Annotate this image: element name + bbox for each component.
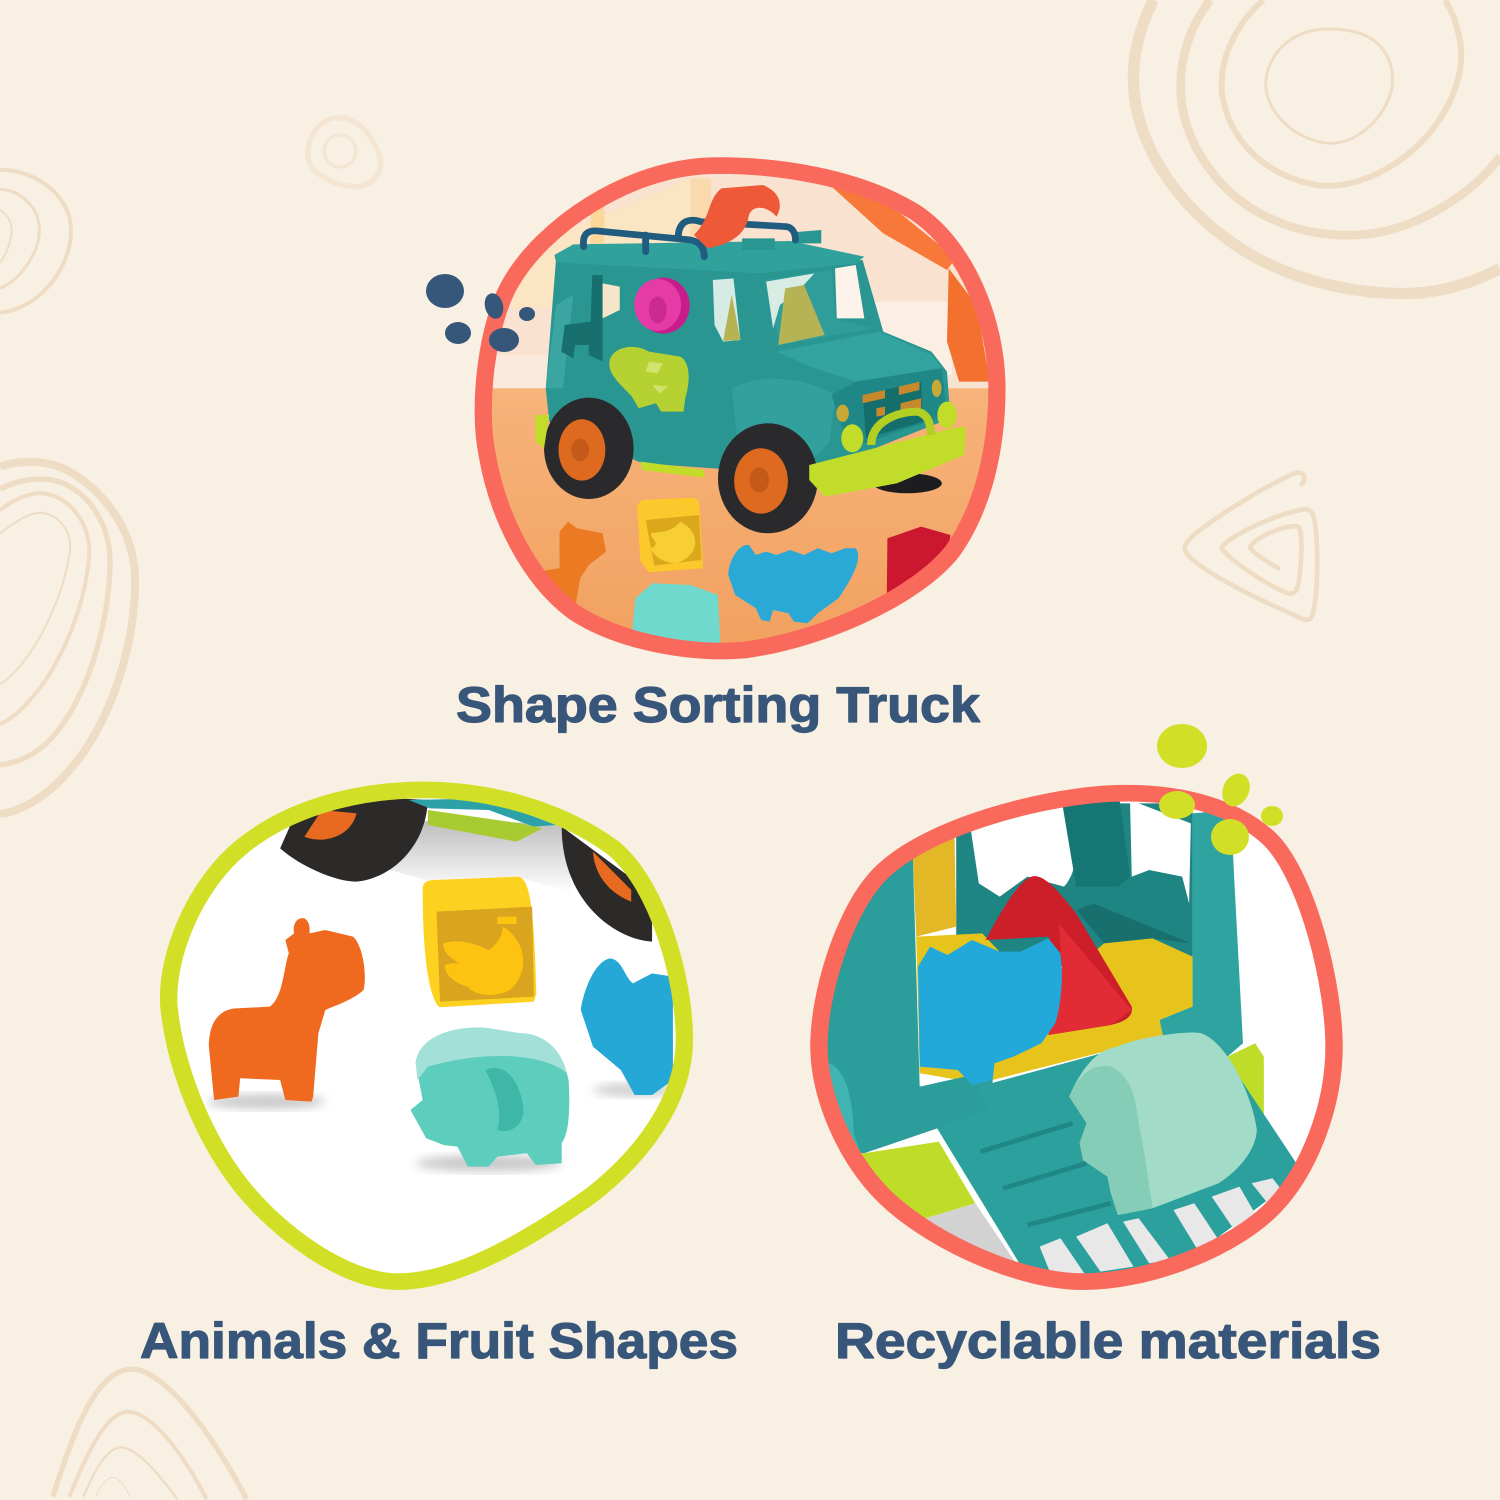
ramp photo: [828, 802, 1326, 1274]
red triangle block: [886, 526, 950, 593]
mint elephant: [632, 583, 720, 643]
ramp grooves: [981, 1123, 1111, 1225]
cab windows: [835, 265, 864, 318]
lime frame: [169, 790, 684, 1282]
heading: Recyclable materials: Recyclable materials: [835, 1313, 1381, 1369]
yellow wall: [913, 833, 956, 937]
lime base left: [850, 1142, 975, 1223]
truck photo: [492, 174, 988, 643]
shapes photo: [177, 798, 676, 1274]
shape: pink pineapple: [649, 278, 690, 334]
rear wheel: [544, 398, 634, 499]
photo panel: animals and fruit shapes: [155, 780, 701, 1295]
heading: Shape Sorting Truck: Shape Sorting Truck: [456, 677, 980, 733]
front tyre: [562, 827, 652, 942]
inner back wall: [956, 803, 1193, 967]
lime dots: [1157, 724, 1283, 855]
roof rails: [583, 220, 795, 257]
photo panel: truck: [470, 155, 1011, 665]
floor shadow: [909, 1203, 1027, 1280]
toucan: [694, 185, 780, 248]
dark interior: [1076, 903, 1191, 943]
truck underside: [409, 798, 556, 827]
truck body: [546, 258, 950, 475]
decorative contour: top right: [1133, 0, 1500, 294]
grille face: [832, 368, 947, 448]
mint elephant: [1069, 1032, 1257, 1215]
right pillar: [1160, 810, 1243, 1057]
decorative contour: triangle spiral: [1185, 473, 1317, 620]
shape: green hippo: [609, 347, 689, 412]
red frame: [483, 166, 997, 651]
ramp slats: [1040, 1178, 1283, 1277]
orange curtain: [832, 187, 956, 270]
left pillar: [819, 853, 993, 1153]
lime bumper: [535, 402, 966, 497]
decorative contour: left upper: [0, 170, 71, 313]
hood: [777, 332, 942, 382]
ramp: [937, 1037, 1299, 1277]
red frame: [819, 793, 1334, 1282]
blue croc: [581, 958, 676, 1097]
yellow floor: [916, 933, 1193, 1082]
photo panel: recyclable materials: [805, 780, 1351, 1295]
yellow block: [637, 498, 703, 572]
rear tyre: [280, 793, 428, 882]
decorative contour: left lower: [0, 462, 135, 814]
floor: [492, 388, 988, 643]
lime base: [1228, 1043, 1264, 1114]
yellow block: [423, 877, 536, 1007]
giraffe cutout: [561, 275, 620, 362]
decorative contour: small ring: [308, 118, 381, 187]
blue croc: [728, 545, 858, 623]
roof: [554, 241, 864, 273]
mint elephant: [410, 1028, 569, 1172]
heading: Animals & Fruit Shapes: Animals & Fruit Shapes: [140, 1313, 738, 1369]
blue croc: [918, 938, 1062, 1085]
orange giraffe: [544, 522, 606, 603]
navy dots: [426, 274, 535, 352]
front wheel: [718, 423, 818, 533]
orange giraffe: [207, 918, 365, 1109]
ground shadow: [390, 820, 571, 884]
red triangle: [986, 876, 1132, 1035]
decorative contour: bottom left: [53, 1369, 247, 1499]
